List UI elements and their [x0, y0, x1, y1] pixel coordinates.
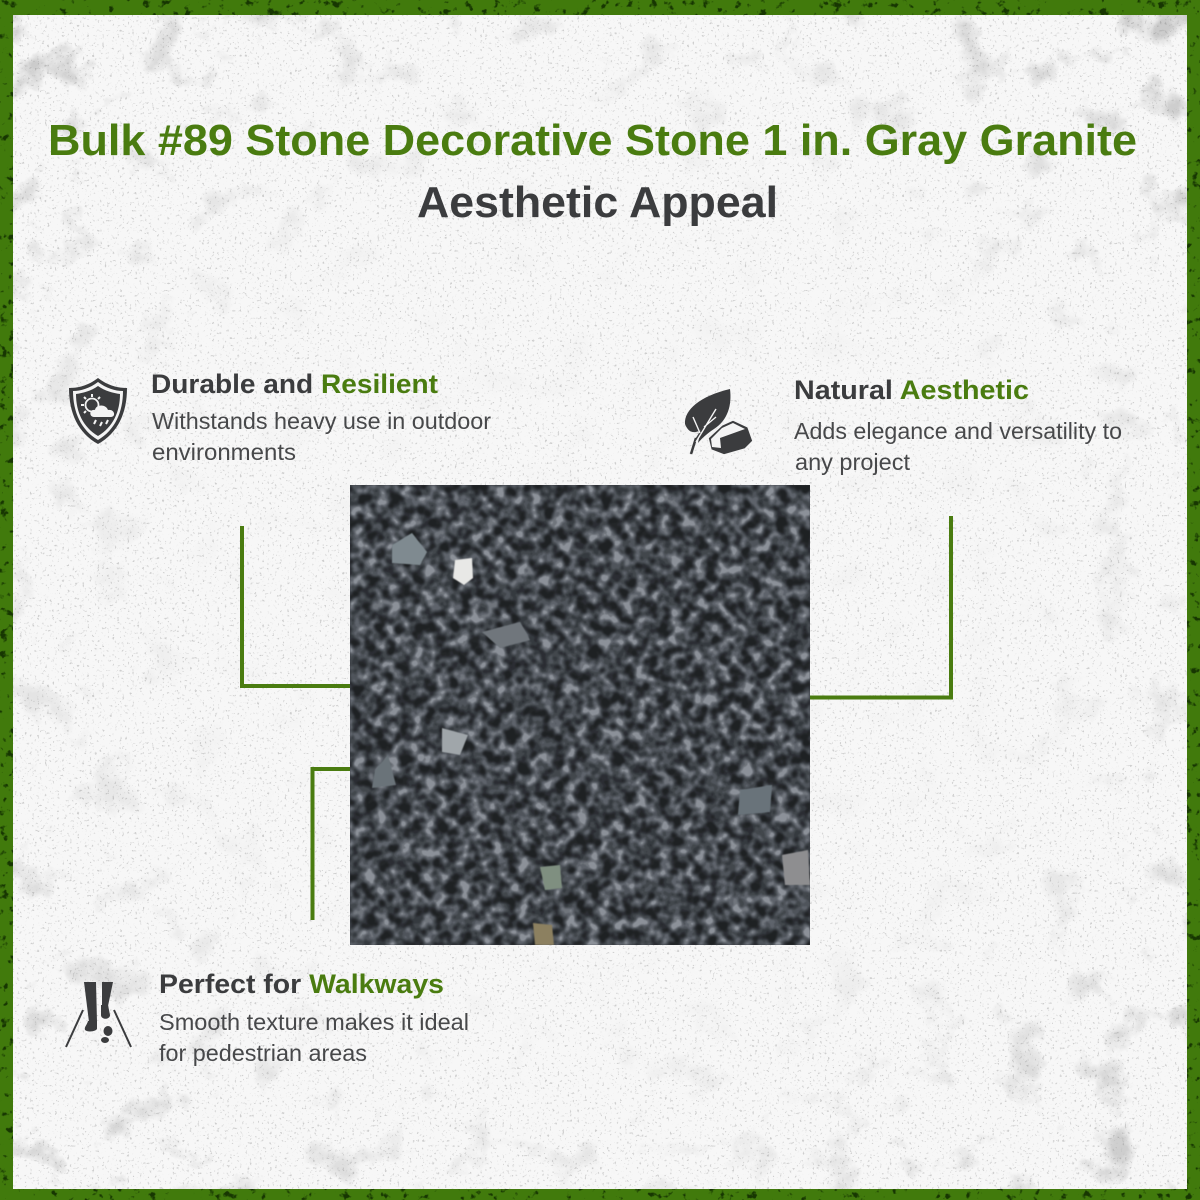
body: perfect for walkways: for pedestrian areas	[159, 1040, 367, 1066]
body: perfect for walkways: Smooth texture makes it ideal	[159, 1009, 469, 1035]
body: natural aesthetic	[794, 418, 1122, 475]
title: Bulk #89 Stone Decorative Stone 1 in. Gray Granite	[48, 116, 1137, 165]
icon: walking feet on path	[66, 982, 131, 1047]
body: durable and resilient: environments	[152, 439, 296, 465]
body: durable and resilient: Withstands heavy use in outdoor	[152, 408, 491, 434]
panel: perfect for walkways	[66, 969, 469, 1066]
panel: natural aesthetic	[685, 375, 1122, 475]
connector: natural to photo	[808, 516, 951, 698]
body: perfect for walkways	[159, 1009, 469, 1066]
heading: durable and resilient: Durable and Resilient	[151, 369, 438, 399]
panel: durable and resilient	[69, 369, 491, 465]
body: durable and resilient	[152, 408, 491, 465]
body: natural aesthetic: any project	[795, 449, 911, 475]
icon: shield with weather	[69, 378, 127, 444]
heading: perfect for walkways: Perfect for Walkways	[159, 969, 444, 999]
connector: durable to photo	[242, 526, 352, 686]
subtitle: Aesthetic Appeal	[417, 178, 778, 227]
gravel photo	[350, 485, 810, 945]
connector: walkways to photo	[312, 769, 352, 920]
body: natural aesthetic: Adds elegance and versatility to	[794, 418, 1122, 444]
heading: natural aesthetic: Natural Aesthetic	[794, 375, 1029, 405]
icon: leaf and rock	[685, 389, 753, 455]
